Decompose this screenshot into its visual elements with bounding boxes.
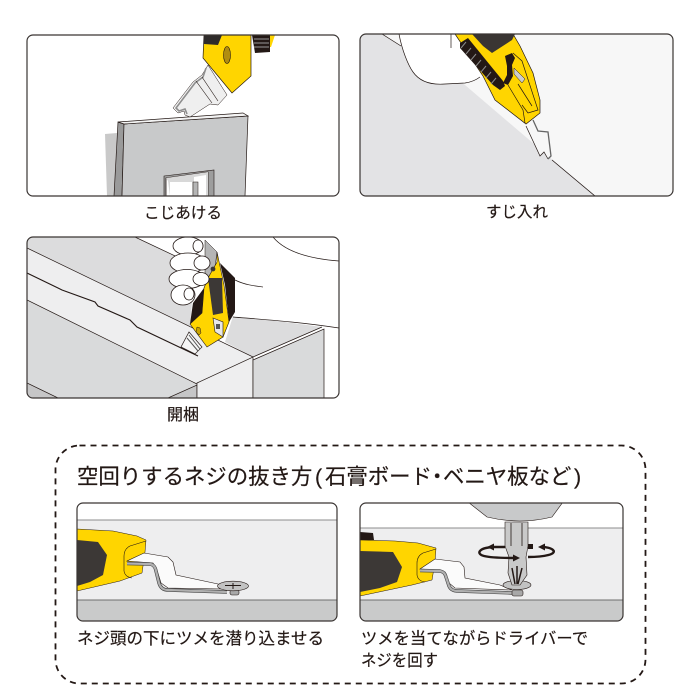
icon: claw blade <box>127 553 227 592</box>
caption: unpacking: 開梱 <box>167 406 199 424</box>
panel: prying open <box>27 35 339 196</box>
caption: prying: こじあける <box>144 205 222 222</box>
caption: step 2: ネジを回す <box>361 652 438 670</box>
icon: knife held vertically <box>190 240 235 347</box>
icon: knife handle <box>203 35 275 93</box>
illustration: wall surface <box>360 34 595 196</box>
panel: scoring <box>360 34 673 196</box>
heading: screw removal: ) <box>574 465 581 489</box>
caption: step 2 <box>361 630 588 670</box>
illustration: cover plate being pried <box>105 113 248 196</box>
panel: unpacking <box>27 237 339 398</box>
icon: drill chuck and bit <box>468 502 563 585</box>
icon: scoring blade <box>526 120 551 159</box>
panel: turn with driver <box>360 502 623 622</box>
heading: screw removal: ベニヤ板など <box>443 465 571 489</box>
icon: blade <box>181 332 202 354</box>
icon: claw blade <box>420 559 513 593</box>
heading: screw removal: ・ <box>426 465 448 489</box>
caption: step 1: ネジ頭の下にツメを潜り込ませる <box>77 629 324 648</box>
icon: screw head <box>218 581 248 595</box>
caption: scoring: すじ入れ <box>486 203 548 221</box>
icon: scraper blade <box>173 65 227 117</box>
icon: knife nose <box>77 529 146 591</box>
icon: knife body <box>455 34 540 124</box>
dashed callout box <box>56 446 646 684</box>
illustration: cardboard box <box>27 237 324 398</box>
heading: screw removal: ( <box>315 465 322 489</box>
heading: screw removal: 空回りするネジの抜き方 <box>77 465 312 489</box>
illustration: hand <box>402 46 462 84</box>
panel: slide claw under screw head <box>77 503 337 622</box>
icon: fist <box>169 237 210 305</box>
illustration: arm <box>233 316 255 318</box>
heading: screw removal: 石膏ボード <box>325 465 432 489</box>
caption: step 2: ツメを当てながらドライバーで <box>361 630 588 648</box>
icon: rotation arrows <box>479 544 554 562</box>
icon: screw head <box>503 580 531 596</box>
icon: knife nose <box>360 532 436 596</box>
